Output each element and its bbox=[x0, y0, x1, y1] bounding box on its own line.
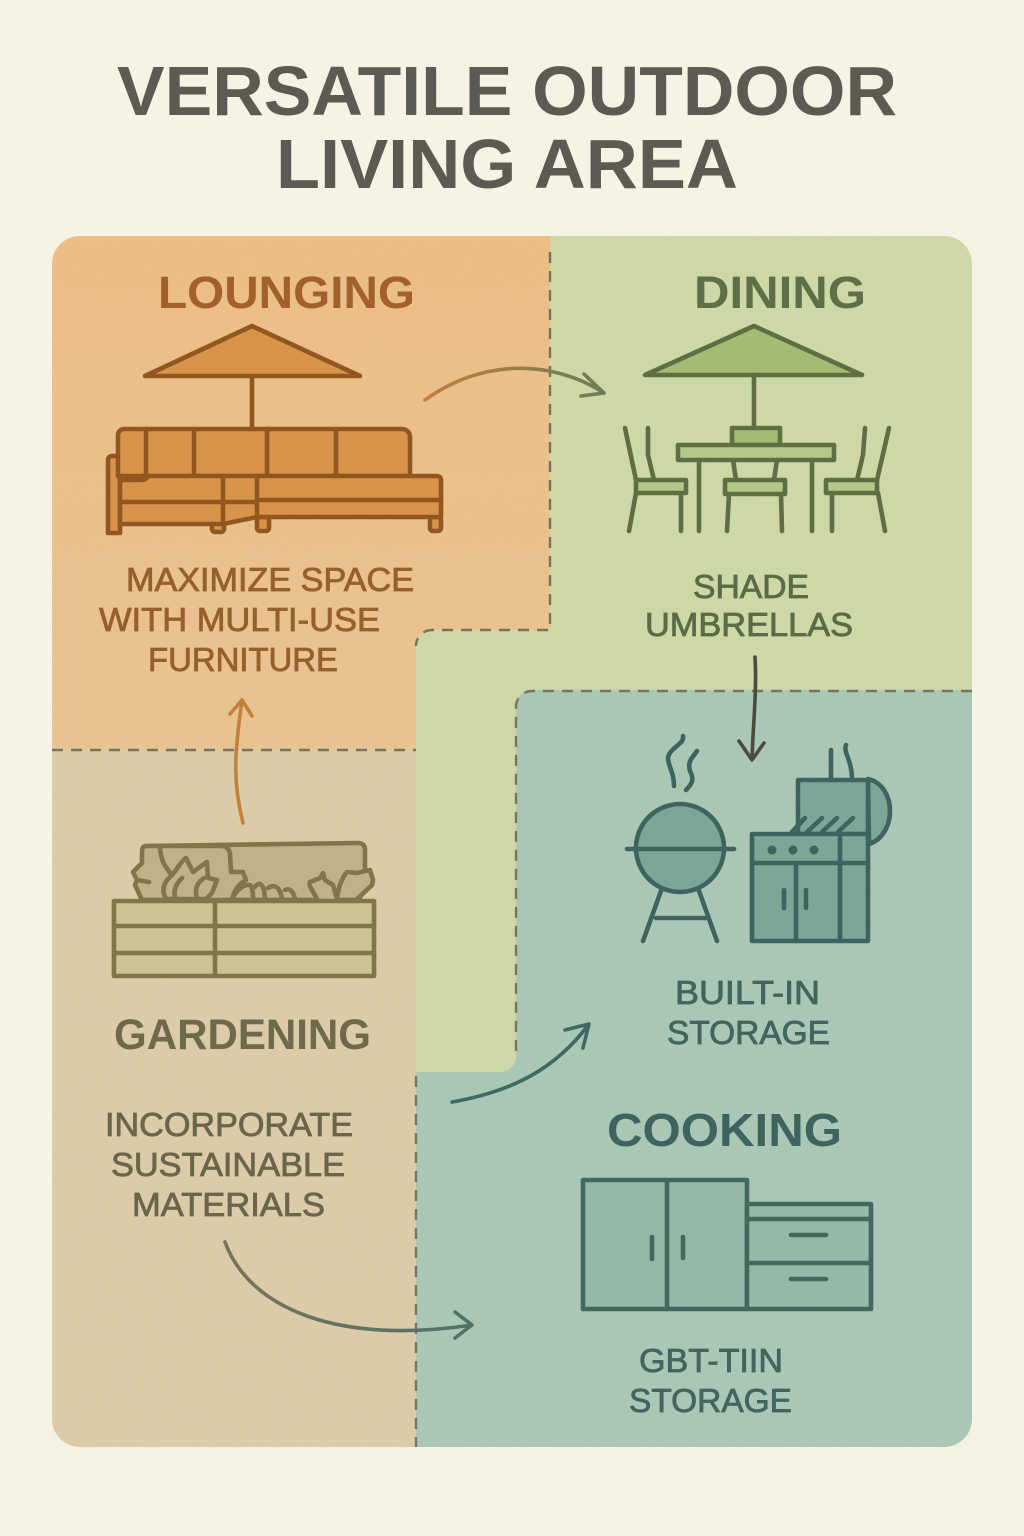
icon: umbrella, table and chairs bbox=[625, 326, 889, 531]
panel: dining background bbox=[416, 236, 972, 1072]
text: built-in storage bbox=[667, 974, 830, 1051]
paper grain overlay bbox=[52, 236, 972, 1447]
text: shade umbrellas bbox=[645, 568, 853, 643]
icon: kettle grill bbox=[627, 736, 734, 941]
arrow: gardening to built-in storage bbox=[452, 1024, 589, 1102]
text: maximize space: WITH MULTI-USE bbox=[99, 601, 380, 638]
text: gbt-tiin storage: STORAGE bbox=[629, 1382, 792, 1419]
text: maximize space: MAXIMIZE SPACE bbox=[126, 561, 414, 598]
arrow: gardening to lounging bbox=[230, 700, 252, 823]
title: VERSATILE OUTDOOR bbox=[117, 52, 897, 130]
panel: gardening background bbox=[52, 750, 416, 1447]
arrow: lounging to dining bbox=[425, 368, 604, 400]
icon: storage cabinets bbox=[583, 1180, 871, 1309]
icon: raised garden bed bbox=[114, 843, 374, 976]
panel: dining content bbox=[625, 267, 889, 643]
panel: cooking background bbox=[416, 690, 972, 1447]
text: incorporate sustainable materials bbox=[105, 1106, 353, 1223]
panel: cooking content bbox=[583, 736, 890, 1419]
text: shade umbrellas: UMBRELLAS bbox=[645, 606, 853, 643]
text: maximize space: FURNITURE bbox=[148, 641, 338, 678]
heading: gardening: GARDENING bbox=[114, 1011, 371, 1059]
heading: lounging: LOUNGING bbox=[158, 267, 415, 318]
text: built-in storage: STORAGE bbox=[667, 1014, 830, 1051]
heading: dining: DINING bbox=[694, 267, 866, 318]
text: incorporate sustainable materials: SUSTAINABLE bbox=[111, 1146, 345, 1183]
text: shade umbrellas: SHADE bbox=[693, 568, 809, 605]
icon: built-in grill station bbox=[752, 745, 890, 941]
zone boundaries: dashed bbox=[52, 252, 972, 1447]
text: incorporate sustainable materials: MATERIALS bbox=[132, 1186, 325, 1223]
text: gbt-tiin storage bbox=[629, 1342, 792, 1419]
icon: umbrella and sofa bbox=[108, 326, 441, 533]
panel: lounging background bbox=[52, 236, 550, 750]
text: maximize space bbox=[99, 561, 414, 678]
text: built-in storage: BUILT-IN bbox=[675, 974, 820, 1011]
arrow: dining to cooking bbox=[739, 657, 764, 760]
text: incorporate sustainable materials: INCORPORATE bbox=[105, 1106, 353, 1143]
panel: gardening content bbox=[105, 843, 374, 1223]
title: LIVING AREA bbox=[276, 125, 738, 203]
text: gbt-tiin storage: GBT-TIIN bbox=[639, 1342, 783, 1379]
heading: cooking: COOKING bbox=[607, 1104, 842, 1156]
panel: lounging content bbox=[99, 267, 441, 678]
arrow: gardening to cooking bbox=[225, 1242, 472, 1338]
title bbox=[117, 52, 897, 203]
